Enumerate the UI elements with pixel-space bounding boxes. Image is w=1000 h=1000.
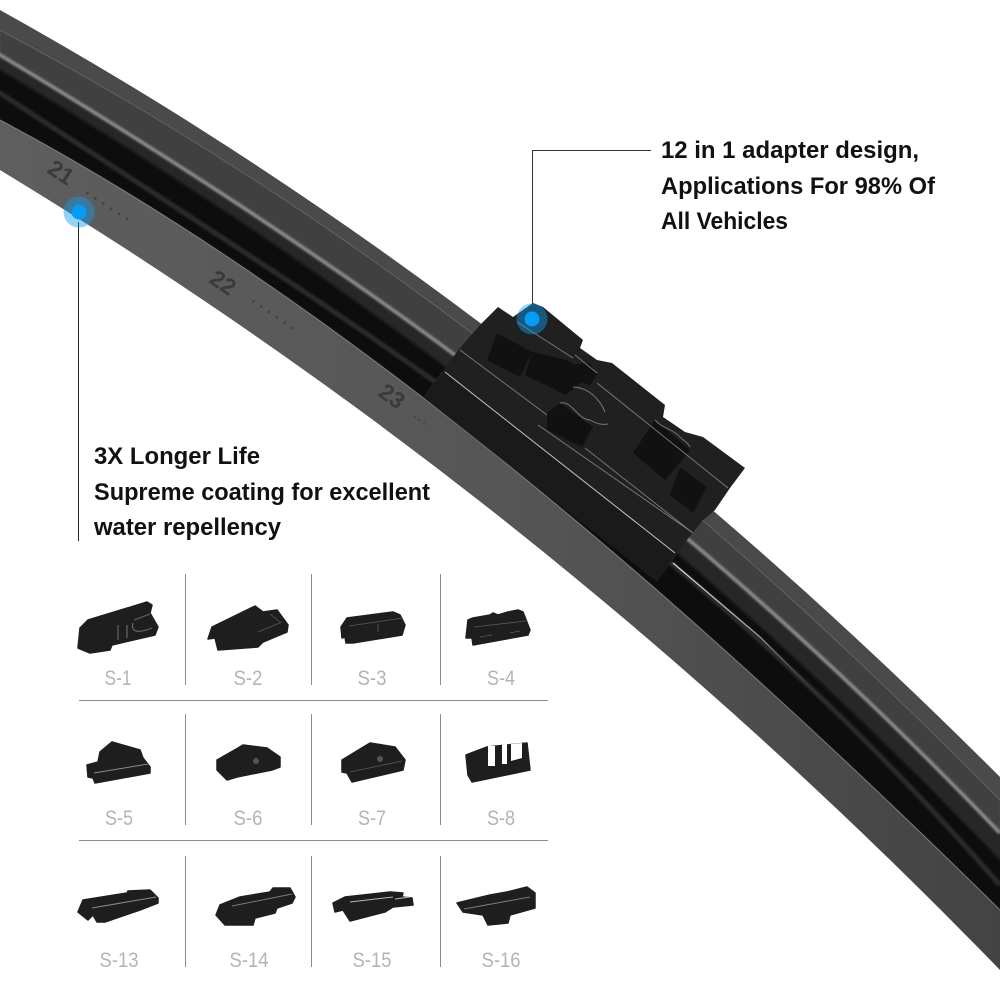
callout text: longer life: Supreme coating for excellent — [94, 479, 430, 506]
marker dot: adapter — [516, 304, 548, 334]
adapter block — [423, 303, 745, 582]
callout text: adapter — [661, 137, 936, 235]
leader line: adapter callout — [532, 150, 651, 306]
callout text: longer life — [93, 443, 430, 541]
blade: channel inner band — [0, 88, 1000, 885]
size mark 21: 21 — [43, 154, 79, 190]
size mark 23: 23 — [374, 378, 410, 414]
adapter S-2 — [208, 606, 288, 690]
adapter S-4 — [466, 610, 530, 690]
adapter body — [423, 303, 745, 582]
adapter S-8: S-8 — [487, 807, 515, 830]
adapter front face — [423, 372, 675, 582]
adapter S-16 — [457, 887, 535, 972]
adapter S-13 — [78, 890, 158, 972]
blade: bright highlight — [0, 50, 1000, 833]
size mark 23: ••• — [411, 412, 430, 430]
adapter clip curves — [560, 387, 690, 447]
callout text: adapter: 12 in 1 adapter design, — [661, 137, 919, 164]
adapter S-1: S-1 — [104, 667, 132, 690]
adapter S-16: S-16 — [482, 949, 520, 972]
adapter S-6 — [217, 745, 280, 830]
size mark 22 — [205, 265, 302, 337]
adapter S-6: S-6 — [234, 807, 262, 830]
adapter S-1 — [78, 602, 158, 690]
adapter S-14 — [216, 888, 295, 972]
adapter grid dividers — [79, 574, 548, 967]
adapter S-8 — [466, 743, 530, 830]
adapter S-7 — [342, 743, 405, 830]
adapter S-3: S-3 — [358, 667, 386, 690]
adapter S-15 — [333, 892, 413, 972]
size mark 22: •••••• — [248, 296, 302, 337]
adapter S-3 — [341, 612, 405, 690]
size mark 21: •••••• — [82, 188, 136, 229]
size mark 21 — [43, 154, 136, 229]
adapter S-5 — [87, 742, 150, 830]
adapter S-7: S-7 — [358, 807, 386, 830]
blade: upper seam — [0, 30, 1000, 800]
adapter S-4: S-4 — [487, 667, 515, 690]
adapter S-15: S-15 — [352, 949, 392, 972]
adapter S-13: S-13 — [100, 949, 138, 972]
adapter ridges — [460, 322, 728, 533]
size mark 22: 22 — [205, 265, 241, 300]
blade: panel edge line — [0, 120, 1000, 910]
adapter bright ridge — [445, 372, 675, 553]
leader line: life callout — [78, 222, 80, 541]
adapter S-2: S-2 — [234, 667, 262, 690]
callout text: longer life: water repellency — [93, 514, 282, 541]
adapter dark blocks — [487, 333, 707, 513]
callout text: adapter: Applications For 98% Of — [661, 173, 936, 200]
callout text: adapter: All Vehicles — [661, 208, 788, 235]
callout text: longer life: 3X Longer Life — [94, 443, 260, 470]
adapter S-5: S-5 — [105, 807, 133, 830]
adapter S-14: S-14 — [230, 949, 269, 972]
size mark 23 — [374, 378, 430, 430]
blade: bright inner edge — [673, 563, 833, 710]
marker dot: blade coating — [64, 196, 94, 228]
